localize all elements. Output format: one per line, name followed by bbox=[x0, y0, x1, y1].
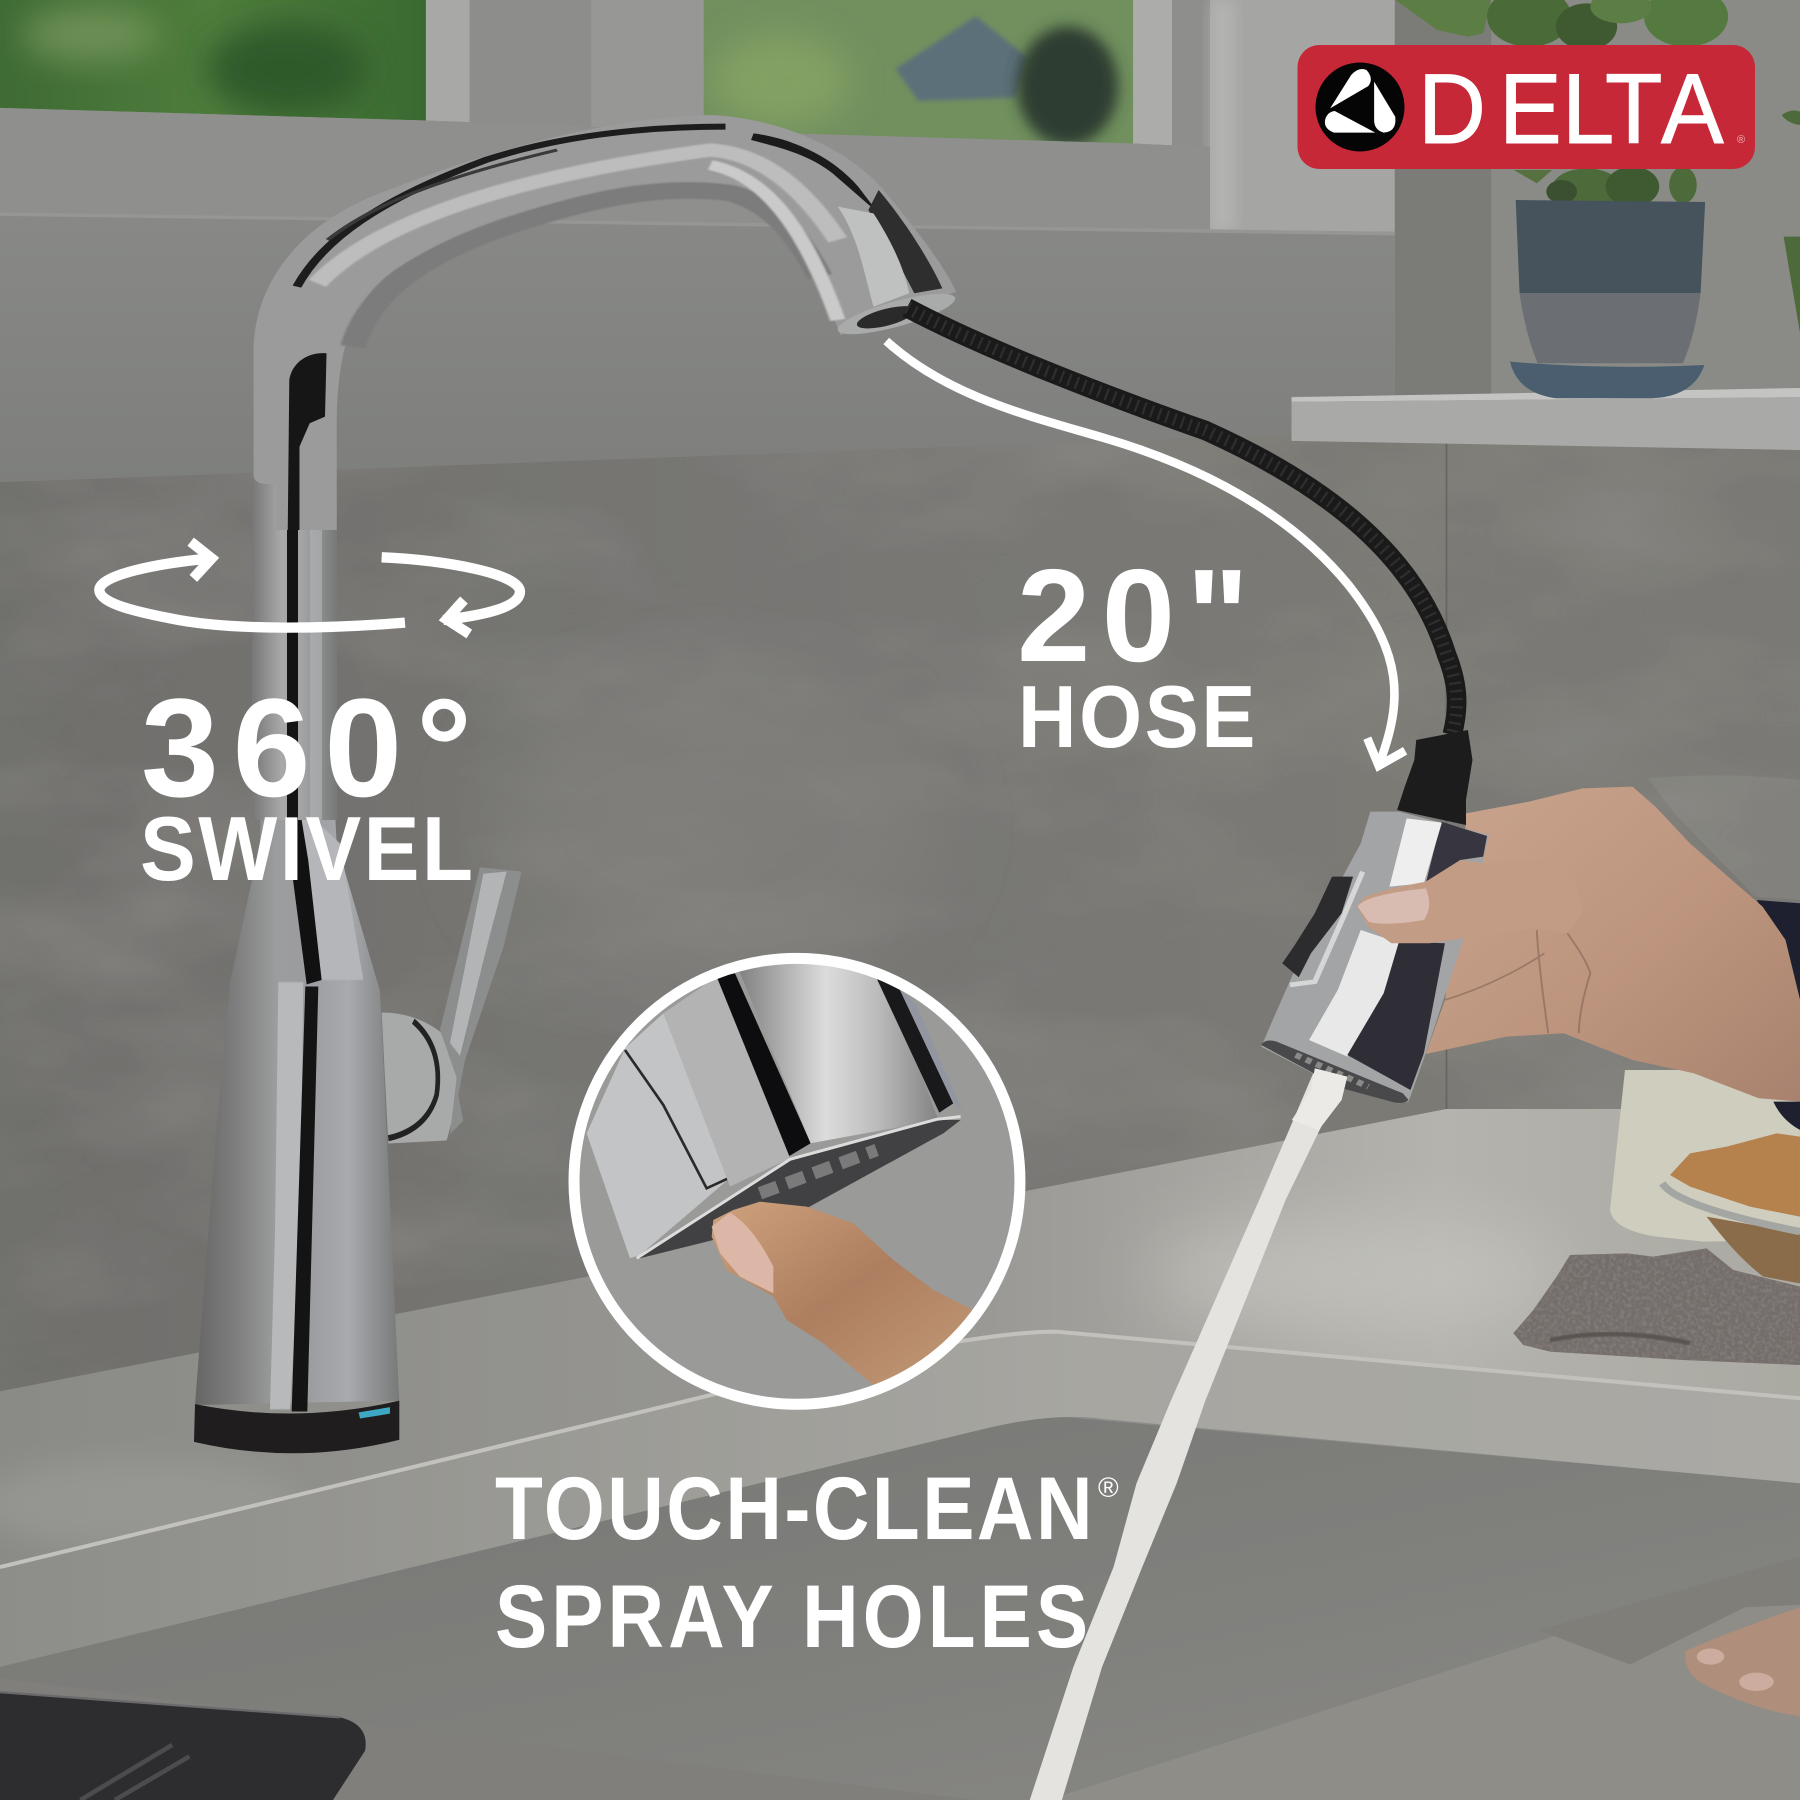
label: 360 swivel: 360° bbox=[141, 669, 472, 826]
window sill and wall bbox=[0, 108, 1395, 482]
hub dark ring bbox=[388, 1021, 438, 1138]
leaves bbox=[1395, 0, 1800, 333]
connector bbox=[1397, 730, 1472, 825]
sink basin bbox=[0, 1414, 1800, 1800]
shelf bbox=[1292, 388, 1800, 450]
faucet base and body bbox=[194, 657, 522, 1453]
label: 20 inch hose: HOSE bbox=[1018, 667, 1255, 766]
mid chrome bbox=[663, 977, 790, 1187]
faucet spout arch bbox=[254, 115, 962, 530]
label: 360 swivel bbox=[140, 669, 473, 900]
upper bright facet bbox=[298, 804, 363, 980]
plant and pot bbox=[1395, 0, 1800, 398]
edge highlight bbox=[0, 1332, 1800, 1567]
chrome shell bbox=[1261, 812, 1489, 1103]
spout top dark streak bbox=[297, 127, 726, 287]
right wall bbox=[1395, 0, 1800, 396]
hose length arrow bbox=[886, 341, 1405, 766]
label: touch-clean spray holes: SPRAY HOLES bbox=[495, 1566, 1088, 1666]
pot bbox=[1516, 200, 1705, 293]
nozzle opening bbox=[852, 302, 920, 333]
inner dark band bbox=[353, 190, 820, 347]
label: 20 inch hose: 20" bbox=[1017, 542, 1249, 689]
upper light band bbox=[317, 150, 838, 283]
fingernail bbox=[712, 1213, 773, 1293]
countertop bbox=[0, 1109, 1800, 1567]
dark object bottom left bbox=[0, 1692, 366, 1800]
label: touch-clean spray holes: TOUCH-CLEAN bbox=[495, 1458, 1093, 1558]
right wall recess bbox=[1395, 0, 1491, 396]
left arrowhead bbox=[191, 542, 212, 578]
sleeve bbox=[1757, 900, 1800, 1130]
spout bend reflection bbox=[751, 133, 879, 213]
window frame bbox=[426, 0, 1396, 232]
logo wordmark: DELTA bbox=[1418, 55, 1724, 165]
marble backsplash bbox=[0, 434, 1800, 1391]
chrome body bbox=[195, 657, 399, 1405]
pot stone band bbox=[1520, 293, 1701, 363]
swivel rotation arrows bbox=[99, 542, 520, 634]
button frame bbox=[1290, 872, 1363, 985]
glass pitcher rim bbox=[1648, 775, 1800, 900]
pie crust bbox=[1670, 1133, 1800, 1217]
pot saucer bbox=[1510, 362, 1704, 398]
inset photo bbox=[587, 957, 973, 1385]
lever bbox=[440, 867, 522, 1134]
label: 20 inch hose bbox=[1017, 542, 1255, 766]
close-up inset: touch-clean spray holes bbox=[574, 957, 1020, 1404]
red badge bbox=[1298, 45, 1755, 169]
inset background bbox=[574, 958, 1020, 1404]
spray head groove bbox=[625, 1050, 728, 1188]
left arc arrow bbox=[99, 558, 405, 628]
lower left counter bbox=[0, 1678, 976, 1800]
spray face bbox=[640, 1120, 961, 1258]
body bright facet bbox=[270, 982, 303, 1409]
inner bright rim bbox=[710, 165, 838, 320]
dish towel bbox=[1513, 1248, 1800, 1365]
spout end highlight bbox=[838, 207, 909, 307]
finger crease bbox=[1445, 930, 1590, 1033]
white reflection upper bbox=[1389, 818, 1442, 887]
label: touch-clean spray holes: ® bbox=[1098, 1472, 1119, 1503]
water stream bbox=[1030, 1068, 1345, 1800]
towel bbox=[1513, 1070, 1800, 1365]
upper dark line bbox=[285, 657, 322, 984]
pull-out hose bbox=[907, 308, 1457, 735]
finger bbox=[712, 1202, 973, 1385]
label: touch-clean spray holes bbox=[495, 1458, 1119, 1666]
spray holes bbox=[1296, 1055, 1368, 1087]
thumb nail bbox=[1358, 888, 1429, 924]
dark reflection lower bbox=[1347, 942, 1445, 1090]
right arc arrow bbox=[382, 557, 520, 620]
nozzle rim bbox=[831, 286, 962, 342]
black reflection bbox=[717, 973, 811, 1156]
window view: left bbox=[0, 0, 427, 124]
mode button bbox=[1282, 877, 1353, 977]
registered mark: ® bbox=[1737, 134, 1745, 146]
label: 360 swivel: SWIVEL bbox=[140, 798, 473, 900]
lower right counter bbox=[1062, 1557, 1800, 1800]
chrome main bbox=[733, 957, 938, 1143]
right arrowhead bbox=[447, 600, 469, 634]
logo mark bbox=[1316, 62, 1404, 152]
second hand at bottom right bbox=[1685, 1607, 1800, 1716]
spray head bbox=[1261, 730, 1489, 1130]
pie dish bbox=[1707, 1217, 1800, 1283]
spray head side bbox=[587, 1013, 732, 1258]
spout end dark streak bbox=[868, 190, 942, 293]
stem dark reflection bbox=[288, 353, 327, 530]
black reflection right bbox=[877, 978, 953, 1113]
Delta logo badge bbox=[1298, 45, 1755, 169]
milk jug bbox=[1610, 1070, 1800, 1242]
lever highlight bbox=[450, 872, 507, 1056]
far corner counter bbox=[1538, 1557, 1800, 1665]
dish rim bbox=[1662, 1183, 1800, 1232]
spout body bbox=[254, 115, 956, 530]
spray face bbox=[1261, 1041, 1409, 1103]
thumb bbox=[1357, 860, 1583, 943]
towel fold bbox=[1550, 1334, 1690, 1343]
handle hub bbox=[382, 1013, 457, 1143]
spout tonal bands bbox=[317, 150, 838, 347]
white ring bbox=[574, 958, 1020, 1404]
back fingers and palm bbox=[1426, 787, 1800, 1102]
black base bbox=[194, 1401, 399, 1453]
teal indicator light bbox=[359, 1407, 390, 1418]
counter front edge bbox=[0, 1332, 1800, 1667]
window view: right with house bbox=[703, 0, 1134, 146]
lower dark line bbox=[292, 986, 318, 1412]
rim highlight bbox=[637, 1117, 961, 1258]
faucet stem bbox=[252, 480, 337, 820]
stream start bbox=[1292, 1068, 1347, 1130]
white reflection lower bbox=[1309, 930, 1401, 1057]
chrome right sliver bbox=[900, 990, 954, 1104]
hand bbox=[1261, 730, 1800, 1130]
spout second streak bbox=[328, 150, 557, 240]
spray nozzles bbox=[760, 1150, 877, 1193]
dark reflection upper bbox=[1426, 822, 1487, 883]
